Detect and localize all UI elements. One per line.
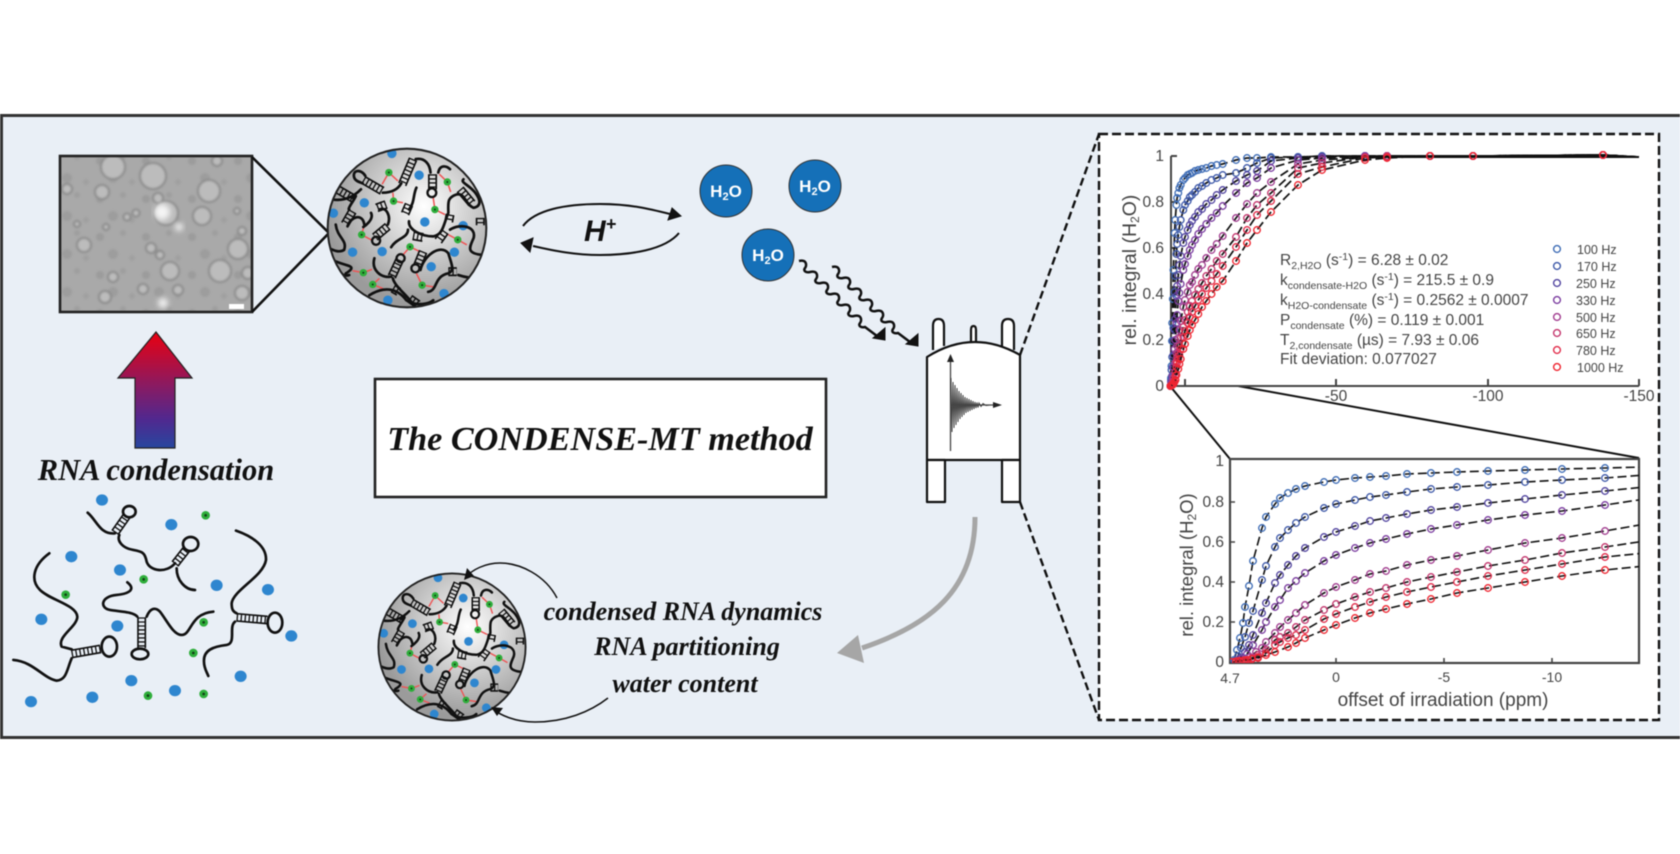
fit parameters text block: (s [1322, 252, 1339, 269]
curved arrows to lower droplet [464, 563, 608, 722]
chart: zoomed saturation profiles: 2 [1185, 514, 1199, 521]
water molecule 3: H [752, 246, 764, 265]
chart: zoomed saturation profiles: -10 [1542, 669, 1562, 685]
fit parameters text block: (s [1367, 292, 1385, 309]
water molecule 3 [742, 229, 794, 281]
zoom lines between charts [1170, 386, 1639, 459]
water molecule 3: O [771, 246, 784, 265]
legend: spin-lock frequencies: 100 Hz [1577, 243, 1617, 257]
fit parameters text block: (µs) = 7.93 ± 0.06 [1353, 332, 1479, 349]
text: CONDENSE-MT outputs: RNA partitioning [593, 632, 780, 661]
title box [375, 379, 826, 497]
NMR spectrometer icon [927, 319, 1020, 502]
fit parameters text block: ) = 215.5 ± 0.9 [1394, 272, 1494, 289]
chart: zoomed saturation profiles: 1 [1215, 453, 1224, 470]
chart: full offset range saturation profiles: -50 [1325, 388, 1348, 405]
fit parameters text block: -1 [1339, 251, 1348, 263]
chart: zoomed saturation profiles: offset of irradiation (ppm) [1338, 690, 1548, 711]
micrograph of condensates [58, 154, 254, 314]
text: CONDENSE-MT outputs: water content [612, 669, 758, 698]
fit parameters text block: -1 [1384, 291, 1394, 303]
fit parameters text block: condensate [1290, 320, 1345, 332]
water molecule 1: O [729, 182, 742, 201]
chart: full offset range saturation profiles: 1 [1155, 148, 1164, 165]
fit parameters text block: ) = 6.28 ± 0.02 [1348, 252, 1448, 269]
chart: zoomed saturation profiles: 4.7 [1220, 670, 1240, 686]
water molecule 2: 2 [811, 186, 818, 198]
chart: zoomed saturation profiles: 0 [1215, 654, 1224, 671]
legend: spin-lock frequencies: 250 Hz [1576, 277, 1616, 291]
panel: results dashed box [1099, 134, 1659, 720]
wavy arrows to spectrometer [799, 261, 918, 346]
chart: zoomed saturation profiles: 0.4 [1202, 574, 1224, 591]
legend: spin-lock frequencies: 330 Hz [1576, 294, 1616, 308]
fit parameters text block: -1 [1384, 271, 1394, 283]
fit parameters text block: k [1280, 292, 1288, 309]
water molecule 1: H [710, 182, 722, 201]
chart: zoomed saturation profiles: O) [1176, 493, 1197, 514]
fit parameters text block: T [1280, 332, 1289, 349]
fit parameters text block: (%) = 0.119 ± 0.001 [1345, 312, 1484, 329]
text: CONDENSE-MT outputs: condensed RNA dynamics [544, 597, 822, 626]
chart: zoomed saturation profiles: 0.2 [1202, 614, 1224, 631]
chart: full offset range saturation profiles: 0.6 [1142, 240, 1164, 257]
zoom lines from micrograph to condensate [252, 157, 329, 312]
fit parameters text block [1280, 251, 1528, 368]
legend: spin-lock frequencies: 780 Hz [1576, 344, 1616, 358]
arrow: grey output arrow [837, 517, 975, 663]
chart: full offset range saturation profiles: 0.2 [1142, 332, 1164, 349]
condensate droplet, lower [378, 573, 526, 721]
water molecule 2 [789, 160, 841, 212]
chart: zoomed saturation profiles: rel. integral (H [1176, 521, 1197, 637]
chart: zoomed saturation profiles: 0.6 [1202, 534, 1224, 551]
chart: full offset range saturation profiles: -100 [1472, 388, 1504, 405]
fit parameters text block: ) = 0.2562 ± 0.0007 [1394, 292, 1528, 309]
chart: zoomed saturation profiles: -5 [1438, 669, 1450, 685]
chart: zoomed saturation profiles [1176, 453, 1645, 711]
chart: full offset range saturation profiles [1119, 148, 1655, 405]
panel: main background [2, 116, 1680, 738]
proton exchange arrows: H [584, 215, 606, 248]
water molecule 1 [700, 165, 752, 217]
chart: zoomed saturation profiles: 0 [1332, 669, 1340, 685]
legend: spin-lock frequencies: 650 Hz [1576, 327, 1616, 341]
fit parameters text block: k [1280, 272, 1288, 289]
label: RNA condensation: RNA condensation [37, 453, 274, 487]
water molecule 3: 2 [764, 255, 771, 267]
dashed connector lines from magnet to results [1020, 134, 1099, 720]
dispersed RNA hairpins with ions [13, 494, 297, 707]
chart: full offset range saturation profiles: 0 [1155, 378, 1164, 395]
fit parameters text block: R [1280, 252, 1291, 269]
legend: spin-lock frequencies [1554, 243, 1624, 375]
legend: spin-lock frequencies: 1000 Hz [1577, 361, 1624, 375]
chart: full offset range saturation profiles: O) [1119, 195, 1141, 216]
title box: The CONDENSE-MT method [387, 421, 814, 458]
fit parameters text block: H2O-condensate [1288, 300, 1367, 312]
chart: full offset range saturation profiles: rel. integral (H [1119, 223, 1141, 345]
fit parameters text block: (s [1367, 272, 1385, 289]
fit parameters text block: 2,condensate [1289, 340, 1353, 352]
water molecule 1: 2 [722, 191, 729, 203]
proton exchange arrows: + [606, 214, 617, 234]
arrow: RNA condensation gradient arrow [118, 332, 192, 448]
chart: full offset range saturation profiles: 2 [1128, 216, 1142, 223]
condensate droplet illustration [328, 149, 486, 307]
proton exchange arrows [521, 204, 681, 255]
fit parameters text block: 2,H2O [1291, 260, 1322, 272]
fit parameters text block: Fit deviation: 0.077027 [1280, 351, 1437, 368]
legend: spin-lock frequencies: 500 Hz [1576, 311, 1616, 325]
water molecule 2: O [818, 177, 831, 196]
chart: zoomed saturation profiles: 0.8 [1202, 494, 1224, 511]
fit parameters text block: P [1280, 312, 1290, 329]
chart: full offset range saturation profiles: -150 [1623, 388, 1655, 405]
chart: full offset range saturation profiles: 0.8 [1142, 194, 1164, 211]
text: CONDENSE-MT outputs [544, 597, 822, 698]
fit parameters text block: condensate-H2O [1288, 280, 1367, 292]
legend: spin-lock frequencies: 170 Hz [1577, 260, 1617, 274]
chart: full offset range saturation profiles: 0.4 [1142, 286, 1164, 303]
water molecule 2: H [799, 177, 811, 196]
